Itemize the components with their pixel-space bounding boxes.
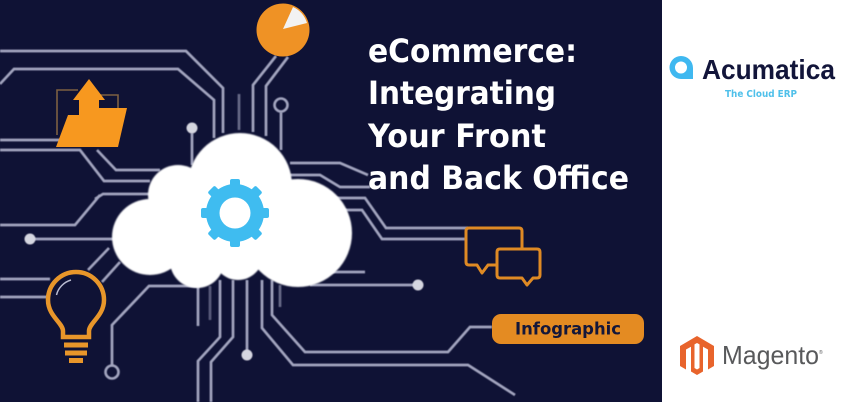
wordmark: Acumatica: Acumatica	[702, 54, 835, 85]
title: and Back Office	[368, 159, 629, 197]
icon: gear	[201, 179, 269, 247]
title: eCommerce:	[368, 32, 577, 70]
icon: chat bubbles	[466, 228, 540, 285]
tagline: The Cloud ERP: The Cloud ERP	[725, 89, 797, 100]
icon: light bulb	[48, 272, 104, 360]
circuit end nodes	[24, 98, 424, 378]
icon: pie chart	[256, 4, 310, 56]
panel: dark background	[0, 0, 662, 402]
registered mark: ®	[819, 349, 823, 356]
logo: Magento	[680, 336, 823, 375]
panel: white logo column	[662, 0, 847, 402]
icon: folder with upload arrow	[56, 79, 127, 147]
badge: Infographic: Infographic	[515, 320, 621, 340]
logo: Acumatica	[670, 54, 835, 85]
title: Integrating	[368, 74, 556, 112]
wordmark: Magento: Magento	[722, 340, 819, 370]
circuit traces	[0, 51, 515, 402]
icon: Acumatica mark	[670, 56, 693, 79]
title	[367, 32, 629, 197]
title: Your Front	[367, 117, 546, 155]
icon: cloud	[112, 133, 352, 288]
icon: Magento mark	[680, 336, 714, 375]
badge: Infographic	[492, 314, 644, 344]
